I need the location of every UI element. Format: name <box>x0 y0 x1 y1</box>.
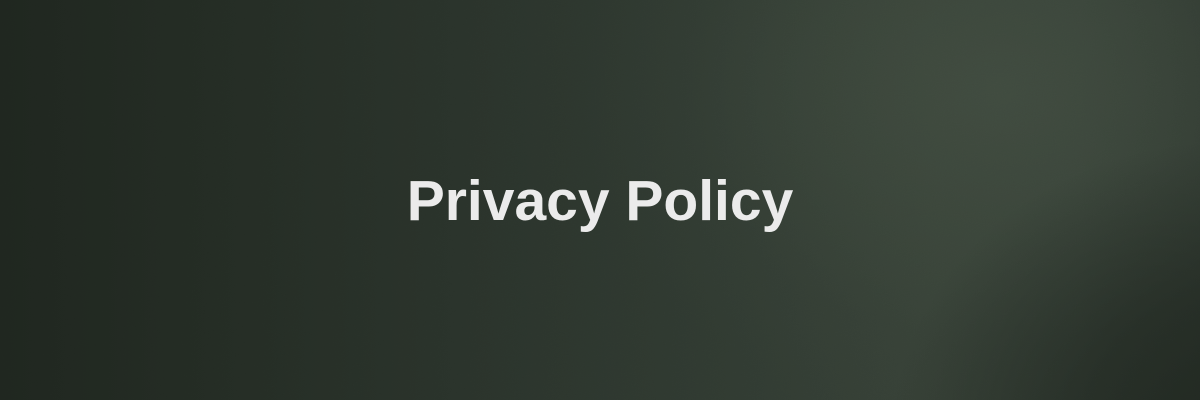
title: Privacy Policy <box>407 169 793 233</box>
